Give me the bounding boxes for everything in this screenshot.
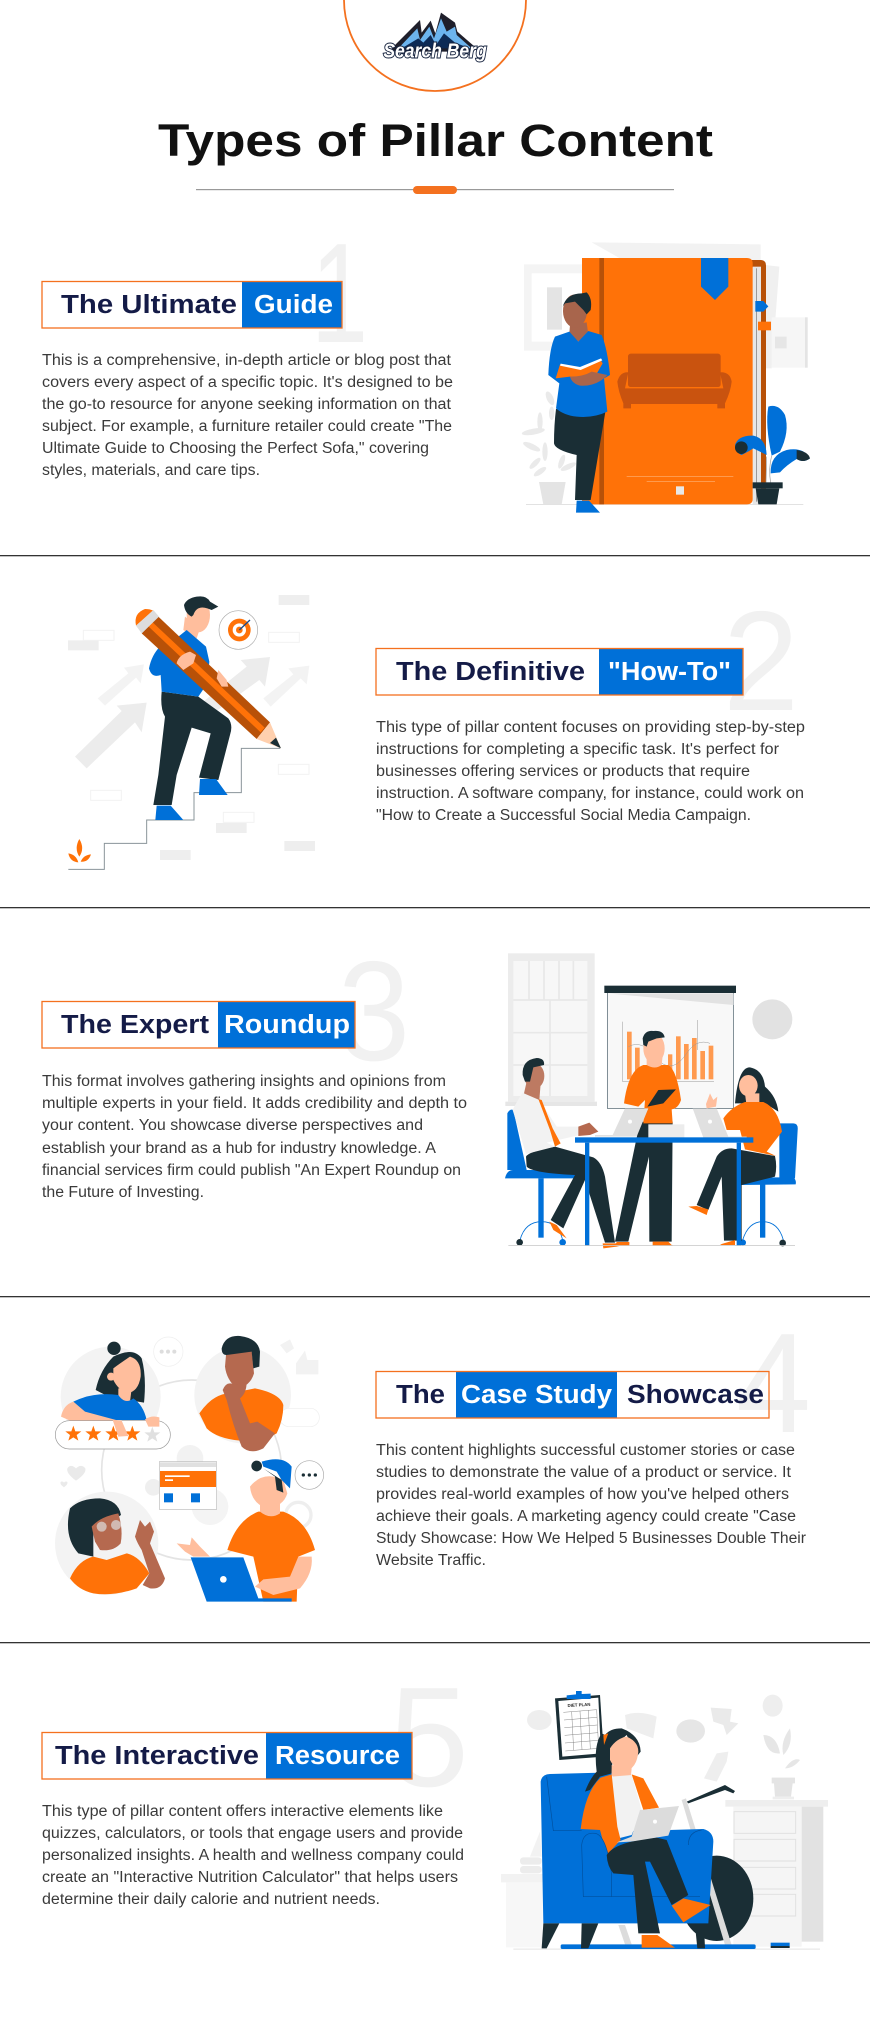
wall clock xyxy=(752,999,792,1039)
illustration: man carrying pencil up stairs xyxy=(68,595,315,869)
title divider xyxy=(196,186,674,194)
armchair xyxy=(541,1772,713,1948)
body text: covers every aspect of a specific topic. It's designed to be xyxy=(42,374,453,391)
climbing man xyxy=(149,596,231,820)
number 4: 4 xyxy=(736,1304,811,1463)
body text: This type of pillar content offers interactive elements like xyxy=(42,1803,443,1820)
body text: This format involves gathering insights and opinions from xyxy=(42,1073,446,1090)
section separator xyxy=(0,1642,870,1643)
clipboard xyxy=(555,1691,604,1760)
woman with rating xyxy=(55,1342,170,1449)
body text: the Future of Investing. xyxy=(42,1184,204,1201)
logo badge: Search Berg xyxy=(383,40,487,62)
body text xyxy=(376,719,805,824)
body text: the go-to resource for anyone seeking information on that xyxy=(42,396,452,413)
heading: The Interactive Resource xyxy=(42,1732,412,1779)
section 2 xyxy=(68,582,805,869)
body text: Website Traffic. xyxy=(376,1552,486,1569)
laptops and table xyxy=(508,1108,795,1246)
giant book xyxy=(582,258,771,504)
body text: provides real-world examples of how you've helped others xyxy=(376,1486,789,1503)
heading: The Ultimate Guide xyxy=(42,281,342,328)
section separator xyxy=(0,555,870,556)
heading: The Definitive "How-To": The Definitive xyxy=(396,658,585,686)
illustration: customer reviews xyxy=(55,1336,324,1602)
web page card xyxy=(159,1462,217,1509)
seated woman xyxy=(688,1067,782,1245)
heading: The Definitive "How-To" xyxy=(376,648,743,695)
number 2: 2 xyxy=(723,582,799,741)
body text: This type of pillar content focuses on providing step-by-step xyxy=(376,719,805,736)
left chair xyxy=(505,1110,575,1246)
heading: The Expert Roundup: Roundup xyxy=(224,1011,350,1039)
body text: Study Showcase: How We Helped 5 Businesses Double Their xyxy=(376,1530,806,1547)
body text xyxy=(376,1442,806,1569)
body text: financial services firm could publish "An Expert Roundup on xyxy=(42,1162,461,1179)
potted plant xyxy=(735,406,810,504)
body text: This is a comprehensive, in-depth article or blog post that xyxy=(42,352,452,369)
dresser xyxy=(725,1800,828,1947)
heading: The Ultimate Guide: Guide xyxy=(254,291,333,319)
number 1: 1 xyxy=(311,214,368,373)
presentation board xyxy=(604,986,736,1108)
body text xyxy=(42,352,453,479)
target speech bubble xyxy=(219,611,258,649)
body text: your content. You showcase diverse perspectives and xyxy=(42,1117,423,1134)
body text: multiple experts in your field. It adds credibility and depth to xyxy=(42,1095,467,1112)
man with laptop xyxy=(177,1459,324,1602)
body text xyxy=(42,1803,464,1908)
section 1 xyxy=(42,214,810,513)
body text: instructions for completing a specific task. It's perfect for xyxy=(376,741,779,758)
body text: This content highlights successful customer stories or case xyxy=(376,1442,795,1459)
orange sprout xyxy=(68,839,91,862)
section separator xyxy=(0,907,870,908)
woman reading xyxy=(548,292,610,513)
body text: achieve their goals. A marketing agency could create "Case xyxy=(376,1508,796,1525)
body text: styles, materials, and care tips. xyxy=(42,462,260,479)
window xyxy=(505,953,597,1106)
heading: The Ultimate Guide: The Ultimate xyxy=(61,291,237,319)
body text: create an "Interactive Nutrition Calculator" that helps users xyxy=(42,1869,458,1886)
body text: businesses offering services or products that require xyxy=(376,763,750,780)
illustration: person with giant book xyxy=(521,242,810,513)
number 3: 3 xyxy=(338,932,410,1091)
section 3 xyxy=(42,932,798,1248)
right chair xyxy=(739,1123,798,1246)
woman with laptop xyxy=(581,1728,711,1948)
body text xyxy=(42,1073,467,1201)
illustration: team meeting xyxy=(505,953,798,1248)
heading: The Expert Roundup: The Expert xyxy=(61,1011,210,1039)
seated man xyxy=(513,1058,630,1248)
body text: instruction. A software company, for instance, could work on xyxy=(376,785,804,802)
heading: The Case Study Showcase: The xyxy=(396,1381,445,1409)
heading: The Case Study Showcase: Case Study xyxy=(461,1381,613,1409)
body text: determine their daily calorie and nutrient needs. xyxy=(42,1891,380,1908)
body text: studies to demonstrate the value of a product or service. It xyxy=(376,1464,792,1481)
illustration: woman on exercise chair xyxy=(501,1691,828,1949)
number 5: 5 xyxy=(389,1658,469,1817)
section separator xyxy=(0,1296,870,1297)
woman with glasses xyxy=(68,1498,165,1594)
heading: The Definitive "How-To": "How-To" xyxy=(608,658,731,686)
heading: The Interactive Resource: The Interactive xyxy=(55,1742,259,1770)
thinking man xyxy=(199,1336,283,1451)
body text: subject. For example, a furniture retailer could create "The xyxy=(42,418,452,435)
exercise bike xyxy=(561,1785,790,1949)
standing man xyxy=(615,1031,681,1246)
section 5 xyxy=(42,1658,828,1949)
logo badge xyxy=(344,0,526,91)
body text: personalized insights. A health and wellness company could xyxy=(42,1847,464,1864)
body text: Ultimate Guide to Choosing the Perfect Sofa," covering xyxy=(42,440,429,457)
giant pencil xyxy=(136,609,281,748)
heading: The Expert Roundup xyxy=(42,1001,355,1048)
body text: establish your brand as a hub for industry knowledge. A xyxy=(42,1140,437,1157)
heading: The Case Study Showcase: Showcase xyxy=(627,1381,764,1409)
heading: The Case Study Showcase xyxy=(376,1371,769,1418)
body text: "How to Create a Successful Social Media Campaign. xyxy=(376,807,751,824)
clipboard: DIET PLAN xyxy=(567,1702,591,1708)
heading: The Interactive Resource: Resource xyxy=(275,1742,400,1770)
body text: quizzes, calculators, or tools that engage users and provide xyxy=(42,1825,463,1842)
section 4 xyxy=(55,1304,811,1602)
title: Types of Pillar Content xyxy=(158,115,713,166)
